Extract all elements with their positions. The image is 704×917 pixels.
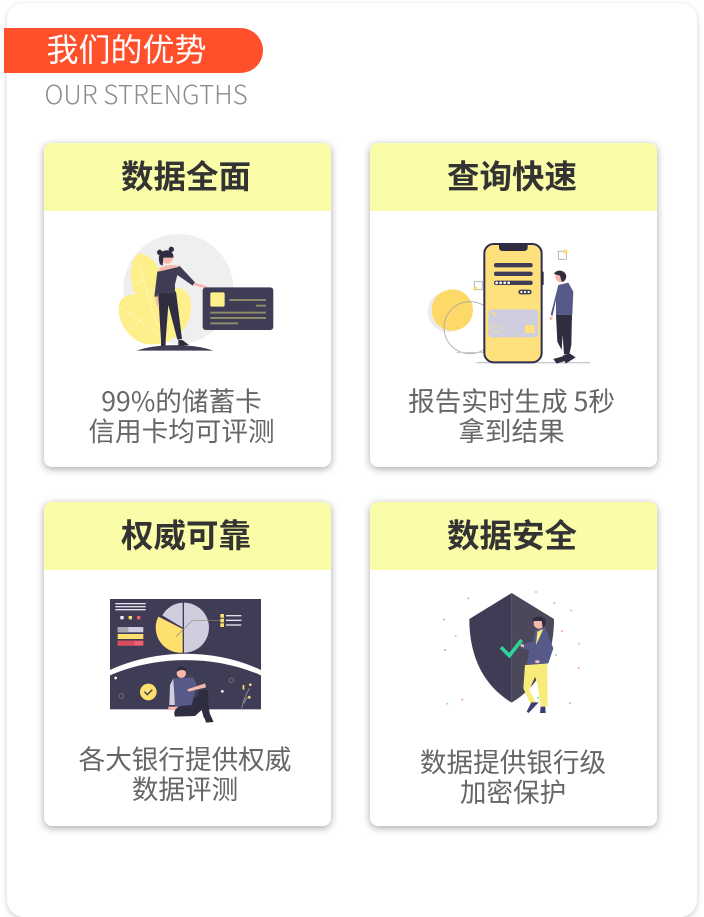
- heading: fast query: [370, 143, 657, 211]
- panel: data security: [370, 502, 657, 826]
- heading: authoritative: [44, 502, 331, 570]
- text: bank-level protection: [420, 741, 606, 810]
- title banner: 我们的优势: [46, 25, 207, 71]
- heading: data security: [370, 502, 657, 570]
- text: card coverage: 信用卡均可评测: [88, 410, 275, 449]
- panel: fast query: [370, 143, 657, 467]
- heading: fast query: 查询快速: [447, 151, 577, 198]
- text: card coverage: 99%的储蓄卡: [101, 380, 262, 419]
- heading: comprehensive data: [44, 143, 331, 211]
- subtitle: OUR STRENGTHS: [44, 75, 248, 112]
- text: bank-level protection: 数据提供银行级: [420, 741, 606, 780]
- heading: comprehensive data: 数据全面: [121, 151, 251, 198]
- heading: authoritative: 权威可靠: [121, 510, 251, 557]
- heading: data security: 数据安全: [447, 510, 577, 557]
- icon: shield with man: [442, 591, 580, 713]
- text: bank-level protection: 加密保护: [460, 771, 566, 810]
- text: instant report: 报告实时生成 5秒: [408, 380, 615, 419]
- text: instant report: 拿到结果: [458, 410, 565, 449]
- text: card coverage: [88, 380, 275, 449]
- text: bank data: [79, 738, 291, 807]
- title banner: [4, 28, 263, 73]
- text: bank data: 各大银行提供权威: [79, 738, 291, 777]
- icon: man with phone: [428, 243, 590, 364]
- panel: comprehensive data: [44, 143, 331, 467]
- panel: authoritative: [44, 502, 331, 826]
- icon: dashboard with seated man: [110, 599, 261, 723]
- text: bank data: 数据评测: [132, 768, 238, 807]
- text: instant report: [408, 380, 615, 449]
- icon: woman with bank card: [118, 234, 274, 351]
